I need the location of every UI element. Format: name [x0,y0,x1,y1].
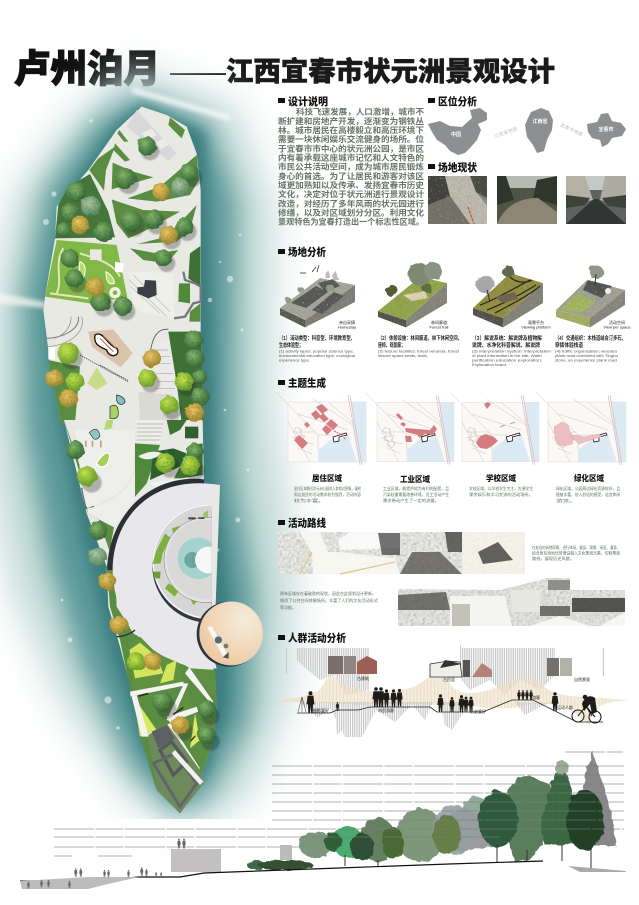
zone title and text: industrial: 工业区域，能提供较为有利的配套，且 [383,485,449,492]
map: Jiangxi: 江西省 [532,118,548,125]
route description left: 等功能。 [280,604,296,611]
heading: site analysis [278,246,326,258]
yellow lawn and curved pond [87,367,107,390]
caption 3: Explanation board. [472,362,507,367]
arrow label: 宜春市地图 [559,121,584,138]
caption 1: (1) activity types: popular science type, [279,348,354,354]
master plan island [0,68,300,849]
lower left lawn [48,360,80,423]
heading: theme generation: 主题生成 [288,376,326,390]
title [14,49,555,91]
section tree row [247,750,616,870]
caption 2: （2）休憩设施：林间廊道、林下休闲空间、 [378,334,462,342]
crowd activity chart [278,645,630,737]
top plaza stripes [127,110,177,161]
zone title and text: residential: 较为丰富。 [294,497,324,504]
zone title and text: school [469,473,533,498]
stair terraces [140,337,177,390]
tree trunks [345,845,591,872]
chart labels: 古民居 [443,676,455,682]
chart labels: 游客 [532,694,540,700]
text block: design description: 域更加熟知以及传承、发扬宜春市历史 [278,180,425,190]
map: Yichun [587,113,626,147]
caption 1: environmental education type, ecological [279,353,355,358]
heading: location analysis: 区位分析 [438,95,477,108]
theme zoning maps [276,392,626,504]
heading: activity route [278,516,326,530]
zone title and text: industrial [383,474,449,504]
water halo [0,68,300,849]
tree shadows [61,142,202,419]
block 4: view per space [556,265,631,330]
text block: design description [278,107,425,227]
cyclist [572,695,601,723]
crescent plaza [107,478,220,668]
south park lawn [117,630,217,770]
caption 1 [279,334,355,362]
upper grey bars [286,645,604,695]
activity route panoramas [278,532,625,626]
caption 4: 穿插体验栈道 [555,341,583,349]
zone title and text: green: 游览。 [556,497,576,504]
route description right: 结合原有场地优势增设融入文化景观元素，切割景观 [532,550,621,556]
zone title and text: school: 学校区域，以学校学生为主，方便学生 [469,485,533,492]
chart labels: 古建筑 [357,675,369,681]
chart labels: 市民游客 [378,707,394,713]
text block: design description: 于宜春市市中心的状元洲公园，是市区 [278,143,424,153]
text block: design description: 身心的首选。为了让居民和游客对该区 [278,171,424,181]
dashed height lines [54,752,624,856]
paved island base [43,107,204,423]
chart labels [313,675,590,714]
map: green [536,392,626,465]
zone title and text: industrial: 工业区域 [400,474,431,484]
lower panorama [398,578,625,626]
tan wave area [278,674,630,725]
zone title and text: green: 植被丰富，给人舒适的感受，适宜休闲 [556,491,620,498]
island upper half [43,107,204,423]
map: school [450,393,539,465]
sand plaza [88,329,133,367]
photo 3 [566,176,626,224]
section elevation [20,750,626,889]
map: China: 中国 [451,131,461,138]
subtitle: —— [170,56,226,87]
map: Yichun: 宜春市 [598,126,614,133]
block 3: viewing platform: 观景平台 [528,319,544,325]
caption 3: （3）解说系统：解说牌及植物解 [472,334,542,342]
block 4: view per space: 活动空间 [609,319,625,325]
caption 4: plank road combined with Tingbu [555,353,618,358]
caption 1: 生态体验型； [279,341,303,349]
route description left [280,590,379,611]
lower right lawn [168,332,204,423]
route description right: 在老旧的街巷周围，进行休闲、健身、观景、闲逛、漫游。 [532,544,620,551]
lawn patches [89,117,199,263]
block 1: homestay: Homestay [338,324,356,330]
tip heritage building [148,723,203,813]
crowd photos [328,656,572,677]
map: China [428,108,487,155]
caption 4 [555,334,626,362]
left forest [55,174,115,238]
caption 2: (2) leisure facilities: forest veranda, forest [378,348,460,354]
block 3: viewing platform [473,265,551,330]
caption 3: (3) interpretation system: interpretation [472,348,551,354]
caption 2 [378,334,462,358]
text block: design description: 科技飞速发展，人口激增，城市不 [296,107,424,117]
arrow label: 江西省地图 [493,125,519,140]
block 2: forest trail: 林间廊道 [431,319,447,325]
caption 4: (4) traffic organization: wooden [555,348,617,354]
zone title and text: school: 课余娱乐和学习交流的活动场所。 [469,491,533,498]
map: Jiangxi [525,108,553,153]
zone title and text: green: 绿化区域，公园周边绿化资源较好，且 [556,485,620,492]
west planting strip [64,420,217,813]
striped terraces [135,420,163,443]
block 1: homestay: 亲自采摘 [339,319,355,325]
text block: design description: 林。城市居民在高楼毅立和高压环境下 [278,125,424,135]
lawn beside plaza [135,443,160,497]
photo 2 [497,176,557,224]
section building [171,839,292,872]
chart labels: 运动人群 [557,704,573,710]
peach viewing platform [197,601,263,667]
ground profile [20,861,543,881]
heading: activity route: 活动路线 [288,516,326,530]
text block: design description: 改造，对经历了多年风雨的状元园进行 [278,198,424,208]
text block: design description: 断扩建和房地产开发，逐渐变为钢铁丛 [278,116,424,126]
heading: crowd activity analysis: 人群活动分析 [288,632,346,644]
right lawn and zigzag wall [188,246,200,287]
chart labels: 摄影爱好 [313,707,329,713]
crowd silhouettes [298,687,601,723]
terrain line [297,700,603,722]
site analysis diagrams [279,262,631,367]
memorial building [128,272,175,320]
chart labels: 历史爱好 [470,708,486,714]
lower grey bars [300,702,550,737]
map: industrial [365,393,454,465]
site photos [428,176,626,224]
heading: design description: 设计说明 [288,95,328,108]
lower island base [64,420,220,813]
block 1: homestay [280,265,356,330]
block 4: view per space: View per space [603,324,631,330]
block 2: forest trail [378,262,449,330]
zone title and text: industrial: 需求带动产生了一定的流量。 [383,497,439,504]
zone title and text: residential: 居住区域靠近状元洲公园的人群相对密集，辐射 [294,485,361,492]
diagonal path line [80,355,128,382]
text block: design description: 内有着承载这座城市记忆和人文特色的 [278,152,424,162]
caption 4: stone, an experience plank road. [555,358,618,362]
caption 3 [472,334,551,367]
chart labels: 自然景观 [574,676,590,682]
top panorama [278,532,525,574]
subtitle: 江西宜春市状元洲景观设计 [226,56,555,87]
main title: 卢州泊月 [14,49,160,91]
section people [27,867,162,889]
zone title and text: school: 学校区域 [486,473,517,483]
route description right [532,544,621,562]
text block: design description: 修缮，以及对区域划分分区。利用文化 [278,208,424,218]
block 2: forest trail: Forest trail [430,324,449,330]
block 3: viewing platform: Viewing platform [521,324,551,330]
caption 3: 说牌、水净化科普解说、解说牌 [472,341,540,349]
caption 2: 座椅、观景廊； [378,341,405,349]
text block: design description: 景观特色为宜春打造出一个标志性区域。 [278,217,424,227]
caption 2: leisure space,seats, trails. [378,353,428,358]
route description left: 原有区域存在着破败的现状，因此在此规划设计更新， [280,590,376,597]
text block: design description: 文化，决定对位于状元洲进行景观设计 [278,189,424,199]
map: residential [276,392,366,465]
caption 3: purification education exploration; [472,358,542,362]
zone title and text: residential [294,473,361,504]
zone title and text: residential: 周边居民的活动需求较为强烈，活动内容 [294,491,361,498]
route description left: 增添了公共空间休憩场所，丰富了人们的文化活动形式 [280,597,379,604]
zone title and text: residential: 居住区域 [312,473,343,483]
photo 1 [428,176,487,224]
caption 1: （1）活动类型：科普型、环境教育型、 [279,334,355,342]
caption 1: experience type. [279,358,310,362]
curved amphitheatre [45,317,78,338]
zone title and text: industrial: 污染较重需要改善环境，员工活动产生 [383,491,449,498]
zone title and text: green: 绿化区域 [574,473,605,483]
heading: site analysis: 场地分析 [288,246,326,258]
caption 3: of plant information in the site; Water [472,353,543,358]
zone title and text: green [556,473,620,504]
text block: design description: 需要一块休闲娱乐交流健身的场所。位 [278,134,424,144]
island lower half [64,420,268,813]
text block: design description: 市民公共活动空间，成为城市居民锻炼 [278,162,424,172]
location maps [428,108,626,155]
small ponds [89,429,100,439]
tree canopies [45,137,220,751]
garden lawn [45,240,127,303]
heading: theme generation [278,376,326,390]
route description right: 路线，展现历史风貌。 [532,555,574,562]
heading: site status: 场地现状 [438,161,477,174]
